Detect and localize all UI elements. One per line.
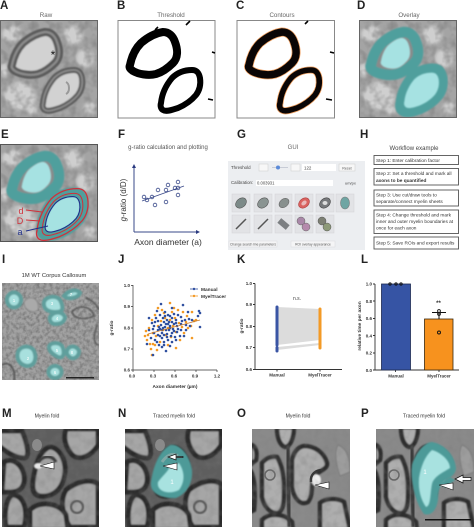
- tick labels: 0.3: [150, 374, 157, 378]
- tick labels: MyelTracer: [427, 374, 451, 378]
- tick labels: 0.9: [124, 304, 130, 309]
- arrowheads: [132, 164, 200, 234]
- orange points: [145, 303, 196, 355]
- tick labels: 0.6: [366, 316, 372, 321]
- step 2: Step 2: Set a threshold and mark all: [376, 171, 452, 177]
- axon numbers: [13, 292, 74, 375]
- number: 1: [170, 480, 174, 486]
- axon numbers: 7: [70, 292, 73, 297]
- threshold row: [231, 164, 355, 171]
- label D: D: [17, 216, 24, 226]
- title Overlay: Overlay: [398, 12, 421, 19]
- myelin outlines d and D: [36, 189, 88, 240]
- manual bar: [382, 284, 410, 370]
- panel D: overlay: [357, 0, 457, 118]
- label N: N: [118, 408, 126, 420]
- data points: [142, 180, 180, 207]
- GUI window: [228, 161, 365, 250]
- asterisk: *: [51, 48, 56, 62]
- label C: C: [236, 0, 244, 12]
- threshold image: [118, 20, 215, 118]
- axon numbers: 5: [56, 348, 59, 353]
- calibration row: um/px: [345, 181, 356, 186]
- tick labels: [246, 281, 332, 378]
- traced axon: [151, 445, 192, 498]
- panel N: traced myelin fold: [118, 408, 222, 527]
- label a: a: [17, 227, 23, 237]
- panel I: corpus callosum: [2, 254, 99, 380]
- y axis label: g-ratio (d/D): [119, 178, 128, 221]
- threshold row: Threshold: [231, 165, 251, 170]
- step 2: [374, 168, 458, 185]
- label J: J: [118, 254, 124, 266]
- panel P: traced myelin fold: [361, 408, 474, 527]
- title: Myelin fold: [286, 414, 311, 420]
- threshold row: Reset: [342, 166, 352, 170]
- panel L: relative time bars: [357, 254, 459, 378]
- title Contours: Contours: [269, 12, 295, 19]
- axon numbers: 3: [51, 301, 54, 306]
- step 4: once for each axon: [376, 226, 417, 232]
- label D: D: [357, 0, 365, 12]
- scale bar: [66, 377, 94, 378]
- axon numbers: 4: [56, 316, 59, 321]
- tick labels: 0.9: [192, 374, 199, 378]
- axes: [373, 284, 459, 372]
- arrow: [455, 475, 471, 483]
- x axis label: Axon diameter (a): [134, 237, 202, 247]
- panel F: g-ratio plot: [118, 129, 208, 247]
- scale bar: [425, 519, 471, 520]
- step 3: [374, 190, 458, 206]
- x label: Axon diameter (µm): [153, 384, 198, 390]
- number: 1: [423, 470, 427, 476]
- legend: Manual: [201, 287, 218, 293]
- manual points: [276, 307, 278, 351]
- n.s. label: n.s.: [293, 296, 301, 302]
- axes: [134, 167, 198, 232]
- tick labels: 0.0: [366, 368, 372, 373]
- panel C: contours: [236, 0, 334, 118]
- title Threshold: Threshold: [157, 12, 185, 19]
- legend: MyelTracer: [201, 294, 226, 300]
- arrow: [168, 454, 183, 460]
- panel G: GUI: [228, 129, 365, 250]
- axon numbers: 1: [13, 298, 16, 303]
- tick labels: 0.8: [366, 299, 372, 304]
- leader lines: [26, 210, 42, 221]
- panel E: measurements: [0, 129, 98, 242]
- title: 1M WT Corpus Callosum: [22, 273, 86, 279]
- tick labels: 1.2: [214, 374, 221, 378]
- tick labels: 0.7: [246, 345, 252, 350]
- tick labels: 0.4: [366, 334, 372, 338]
- calibration row: 0.003931: [257, 181, 275, 186]
- label P: P: [361, 408, 369, 420]
- panel M: myelin fold: [0, 408, 99, 527]
- step 2: axons to be quantified: [376, 178, 427, 184]
- regression line: [148, 320, 200, 334]
- tick labels: 1.0: [366, 282, 372, 286]
- title: g-ratio calculation and plotting: [128, 145, 208, 151]
- tool buttons: [232, 194, 354, 233]
- traced axon: [412, 442, 456, 514]
- paired lines: [277, 307, 320, 350]
- arrowhead: [40, 462, 54, 469]
- axes: [253, 284, 342, 372]
- axon numbers: 2: [27, 356, 30, 361]
- tracer points: [318, 309, 322, 348]
- panel A: raw micrograph: [0, 0, 98, 118]
- label K: K: [237, 254, 246, 266]
- micrograph: [0, 429, 99, 527]
- micrograph: [121, 429, 222, 527]
- axon outline a: [45, 197, 80, 232]
- tick labels: 1.0: [246, 281, 252, 286]
- step 4: Step 4: Change threshold and mark: [376, 212, 452, 218]
- label B: B: [117, 0, 125, 12]
- panel J: scatter: [109, 254, 226, 390]
- legend: [190, 287, 226, 300]
- tick labels: 0.0: [129, 374, 136, 378]
- step 4: inner and outer myelin boundaries at: [376, 219, 454, 225]
- arrowhead: [163, 463, 177, 470]
- tick labels: 0.6: [124, 368, 130, 372]
- tool icons: [234, 196, 350, 231]
- label G: G: [237, 129, 246, 141]
- title: Myelin fold: [35, 414, 60, 420]
- title: Traced myelin fold: [403, 414, 445, 420]
- traced axons: [7, 290, 80, 378]
- micrograph: [2, 283, 99, 380]
- micrograph: [374, 427, 474, 527]
- label d: d: [18, 206, 24, 216]
- label O: O: [237, 408, 246, 420]
- tracer bar: [424, 319, 453, 370]
- label M: M: [2, 408, 12, 420]
- title Raw: Raw: [40, 12, 53, 19]
- tick labels: 1.0: [124, 283, 130, 288]
- y label: relative time per axon: [357, 301, 363, 351]
- tick labels: Manual: [269, 372, 285, 378]
- tick labels: 0.8: [246, 324, 252, 329]
- axes: [131, 285, 217, 372]
- tick labels: MyelTracer: [308, 372, 332, 378]
- label H: H: [360, 129, 368, 141]
- title GUI: GUI: [288, 145, 299, 151]
- overlay image: [359, 20, 457, 118]
- bottom buttons: ROI overlay appearance: [295, 242, 331, 246]
- y label: g-ratio: [109, 320, 115, 335]
- error bar: [432, 312, 446, 319]
- tick labels: 0.6: [246, 367, 252, 372]
- label E: E: [1, 129, 9, 141]
- blue points: [147, 304, 200, 355]
- panel K: paired g-ratio: [237, 254, 342, 378]
- title: Traced myelin fold: [153, 414, 195, 420]
- calibration row: Calibration:: [231, 180, 253, 185]
- micrograph: [250, 427, 350, 527]
- raw image: [0, 20, 98, 118]
- tick labels: [366, 282, 451, 378]
- tick labels: 0.9: [246, 302, 252, 307]
- data points: [389, 283, 440, 334]
- tick labels: 0.8: [124, 326, 130, 330]
- trend line: [142, 186, 184, 201]
- y label: g-ratio: [239, 318, 245, 333]
- label A: A: [0, 0, 8, 12]
- tick labels: 0.6: [171, 374, 178, 378]
- contour image: [237, 20, 334, 118]
- tick labels: 0.2: [366, 350, 372, 356]
- label L: L: [361, 254, 368, 266]
- step 3: Step 3: Use cut/draw tools to: [376, 192, 437, 198]
- step 1: Step 1: Enter calibration factor: [376, 158, 440, 164]
- panel O: myelin fold: [237, 408, 350, 527]
- annotated overlay image: [0, 144, 98, 242]
- label I: I: [2, 254, 5, 266]
- significance: **: [436, 301, 441, 307]
- step 5: Step 5: Save ROIs and export results: [376, 240, 455, 246]
- step 3: separate/connect myelin sheets: [376, 199, 443, 205]
- step 4: [374, 210, 458, 234]
- tick labels: Manual: [388, 374, 404, 378]
- title: Workflow example: [390, 146, 439, 152]
- axon numbers: 8: [71, 350, 74, 355]
- threshold row: 122: [304, 166, 312, 170]
- tick labels: [124, 283, 221, 378]
- panel H: workflow: [360, 129, 458, 249]
- arrowhead: [439, 483, 453, 490]
- panel B: threshold: [117, 0, 215, 118]
- calibration row: [231, 180, 356, 186]
- bottom buttons: [229, 241, 335, 247]
- arrowhead: [315, 482, 329, 489]
- axon numbers: 6: [54, 370, 57, 375]
- label F: F: [118, 129, 125, 141]
- bottom buttons: Change search line parameters: [230, 242, 276, 246]
- tick labels: 0.7: [124, 346, 130, 352]
